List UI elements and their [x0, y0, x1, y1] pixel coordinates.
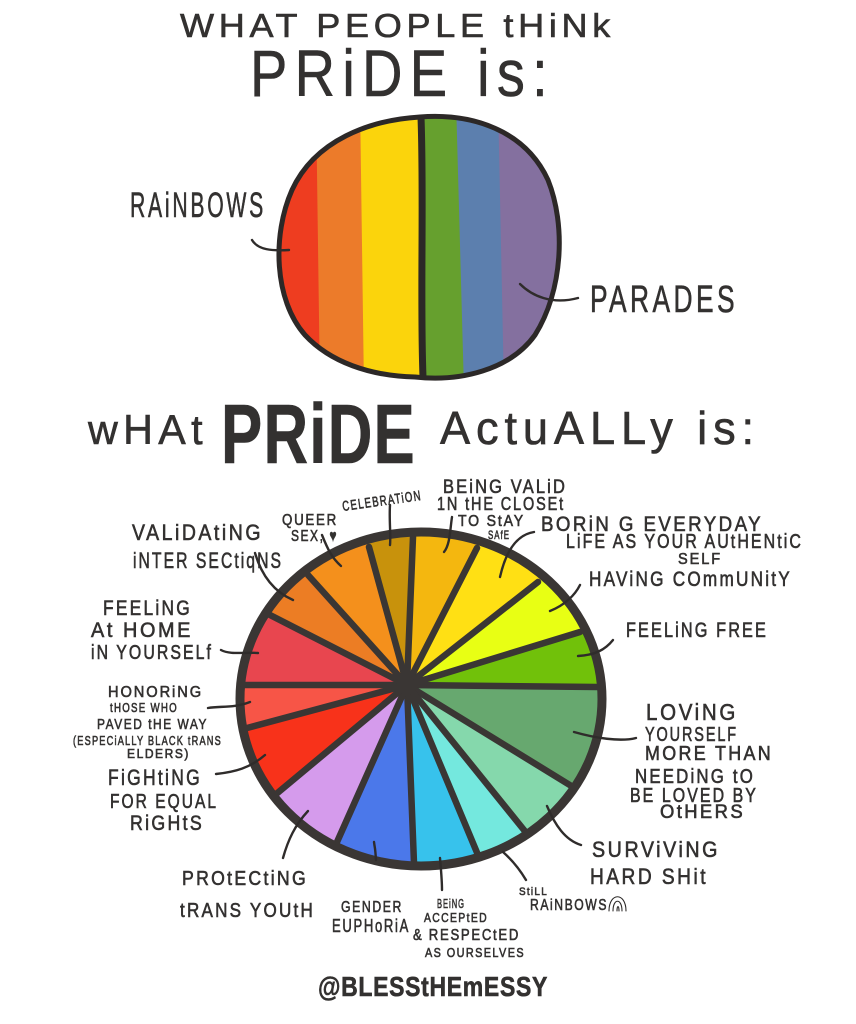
label: still rainbows: [519, 886, 626, 914]
label: gender euphoria: [332, 899, 410, 936]
label: surviving hard shit: HARD SHit: [590, 864, 708, 889]
label: feeling free: FEELiNG FREE: [626, 619, 768, 642]
label: feeling at home in yourself: iN YOURSELf: [91, 642, 213, 664]
label: loving yourself: BE LOVED BY: [630, 785, 758, 807]
label: boring everyday life: SELF: [678, 551, 722, 568]
label: feeling at home in yourself: [91, 597, 213, 664]
title: what people think pride is: WHAT PEOPLE tHiNk: [180, 7, 615, 44]
label: validating intersections: iNTER SECtiqNS: [133, 548, 283, 573]
label: parades: PARADES: [590, 279, 738, 321]
label: queer sex: SEX, ♥: [291, 528, 338, 545]
label: queer sex: QUEER: [282, 512, 338, 529]
label: loving yourself: MORE THAN: [645, 743, 773, 765]
pride wheel chart: [236, 528, 606, 870]
heading: what pride actually is: PRiDE: [221, 387, 416, 481]
wheel spokes: [243, 537, 597, 863]
label: feeling at home in yourself: At HOME: [91, 619, 193, 642]
label: being accepted and respected: AS OURSELVES: [425, 945, 525, 960]
label: gender euphoria: EUPHoRiA: [332, 916, 410, 936]
label: honoring those who paved the way: (ESPECiALLY BLACK tRANS: [73, 733, 222, 748]
label: fighting for equal rights: FOR EQUAL: [110, 791, 218, 813]
label: honoring those who paved the way: tHOSE WHO: [110, 700, 178, 715]
label: being accepted and respected: [413, 896, 525, 960]
label: boring everyday life: LiFE AS YOUR AUtHENtiC: [566, 531, 803, 553]
label: queer sex: [282, 512, 338, 545]
label: feeling at home in yourself: FEELiNG: [103, 597, 192, 620]
label: surviving hard shit: [590, 837, 720, 889]
heading: what pride actually is: [87, 387, 760, 481]
label: fighting for equal rights: RiGHtS: [130, 812, 204, 835]
label: loving yourself: [630, 699, 773, 823]
label: rainbows: RAiNBOWS: [130, 186, 266, 225]
label: boring everyday life: [541, 513, 803, 568]
label: validating intersections: VALiDAtiNG: [132, 520, 263, 545]
credit: @blessthemessy: @BLESStHEmESSY: [318, 971, 548, 1002]
label: being valid in the closet to stay safe: 1N tHE CLOSEt: [437, 494, 565, 514]
leader lines: [208, 505, 636, 890]
label: validating intersections: [132, 520, 283, 573]
label: boring everyday life: BORiN G EVERYDAY: [541, 513, 763, 536]
label: being valid in the closet to stay safe: [437, 477, 567, 542]
heading: what pride actually is: wHAt: [87, 406, 208, 453]
label: honoring those who paved the way: HONORiNG: [108, 684, 203, 701]
label: rainbows: [130, 186, 289, 250]
label: being valid in the closet to stay safe: SAfE: [488, 528, 510, 542]
label: gender euphoria: GENDER: [341, 899, 403, 916]
label: fighting for equal rights: [108, 765, 218, 835]
label: loving yourself: LOViNG: [646, 699, 738, 725]
title: what people think pride is: PRiDE is:: [250, 36, 555, 110]
label: still rainbows: RAiNBOWS: [530, 897, 608, 914]
label: fighting for equal rights: FiGHtiNG: [108, 765, 202, 790]
label: having community: HAViNG COmmUNitY: [589, 568, 792, 591]
label: loving yourself: YOURSELF: [645, 724, 738, 746]
label: honoring those who paved the way: PAVED tHE WAY: [97, 716, 208, 733]
label: still rainbows: StiLL: [519, 886, 548, 898]
label: being accepted and respected: BEiNG: [437, 896, 465, 911]
label: being valid in the closet to stay safe: TO StAY: [458, 513, 525, 530]
label: loving yourself: NEEDiNG tO: [635, 766, 755, 788]
heading: what pride actually is: ActuALLy is:: [440, 402, 760, 454]
label: honoring those who paved the way: ELDERS): [127, 746, 190, 761]
rainbow parades blob chart: [276, 114, 562, 381]
label: being valid in the closet to stay safe: BEiNG VALiD: [443, 477, 567, 498]
icon: small rainbow: [609, 897, 626, 911]
label: honoring those who paved the way: [73, 684, 222, 761]
label: being accepted and respected: & RESPECtED: [413, 927, 520, 944]
label: loving yourself: OtHERS: [660, 802, 745, 823]
label: parades: [520, 279, 738, 321]
label: celebration: CELEBRATiON: [341, 487, 423, 514]
label: protecting trans youth: [180, 868, 315, 922]
label: protecting trans youth: PROtECtiNG: [182, 868, 308, 890]
label: protecting trans youth: tRANS YOUtH: [180, 900, 315, 922]
label: surviving hard shit: SURViViNG: [592, 837, 720, 862]
title: what people think pride is: [180, 7, 615, 110]
label: being accepted and respected: ACCEPtED: [424, 910, 488, 925]
